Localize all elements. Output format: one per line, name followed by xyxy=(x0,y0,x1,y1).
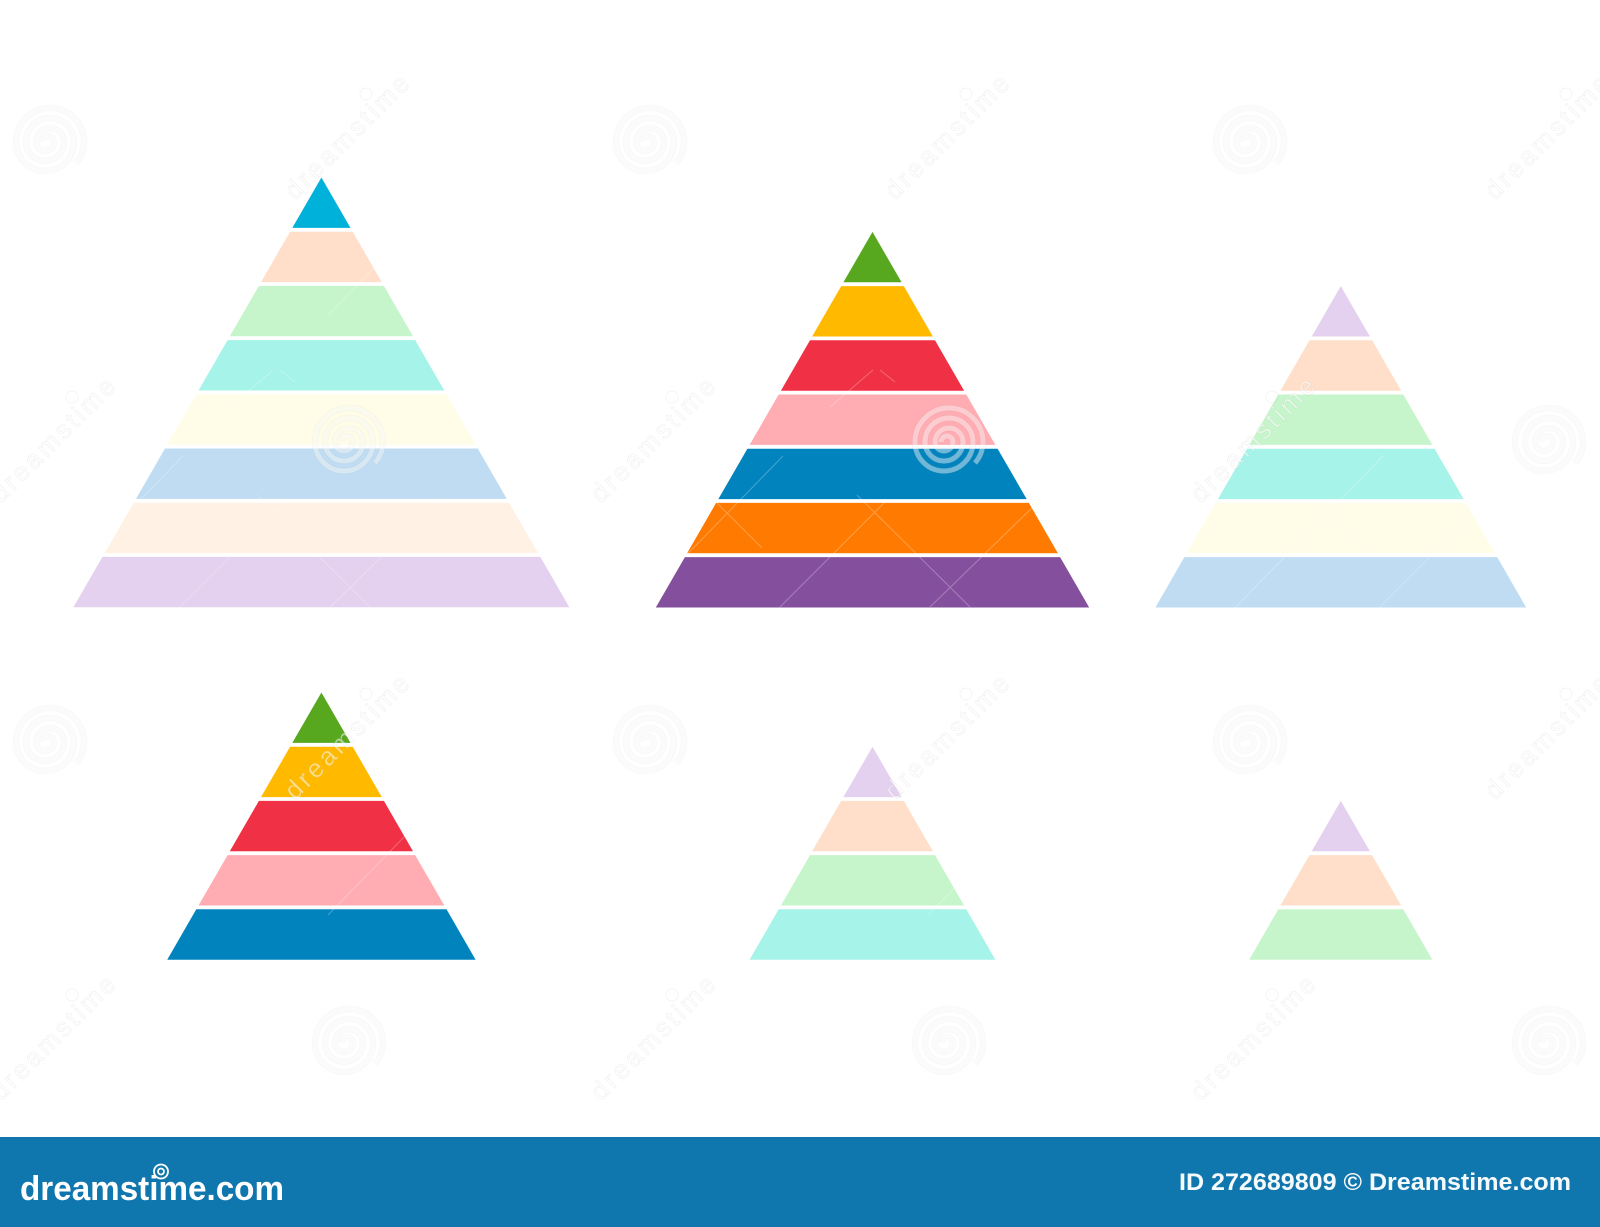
band 6 light blue xyxy=(1155,557,1526,608)
band 3 red xyxy=(230,801,413,851)
band 4 pink xyxy=(198,855,444,906)
band 3 mint green xyxy=(230,286,413,336)
band 6 orange xyxy=(687,503,1058,553)
band 3 mint green xyxy=(1249,909,1432,960)
band 1 lilac xyxy=(843,747,902,797)
footer bar xyxy=(0,1137,1600,1227)
band 4 aqua xyxy=(198,340,444,390)
band 2 amber xyxy=(812,286,933,336)
watermark: spirals xyxy=(16,108,1583,1072)
band 3 mint green xyxy=(1249,394,1432,445)
pyramid: three pastel bands xyxy=(1249,801,1432,960)
band 2 peach xyxy=(1280,855,1401,906)
pyramid: five saturated bands xyxy=(167,692,476,960)
band 3 red xyxy=(781,340,964,391)
band 1 lilac xyxy=(1312,801,1370,851)
band 7 cream xyxy=(105,503,538,553)
band 8 lilac xyxy=(73,557,569,607)
band 3 mint green xyxy=(781,855,964,906)
band 4 aqua xyxy=(750,909,995,960)
band 6 light blue xyxy=(136,448,507,499)
footer image id and credit: ID 272689809 © Dreamstime.com xyxy=(1179,1169,1571,1196)
band 2 peach xyxy=(812,801,933,851)
pyramid: four pastel bands xyxy=(750,747,995,960)
band 2 peach xyxy=(1280,340,1401,391)
footer logo wordmark: dreamstime.com xyxy=(20,1170,284,1208)
band 5 blue xyxy=(167,909,476,960)
band 1 green xyxy=(292,692,350,743)
band 5 pale yellow xyxy=(167,394,476,445)
watermark: diagonal lines xyxy=(28,70,1600,915)
band 2 peach xyxy=(261,232,382,282)
band 4 aqua xyxy=(1218,449,1464,499)
pyramid: seven saturated bands xyxy=(656,232,1089,608)
band 4 pink xyxy=(750,394,995,445)
band 5 blue xyxy=(718,449,1027,499)
pyramid: eight pastel bands xyxy=(73,178,569,607)
footer logo spiral icon xyxy=(154,1164,168,1178)
band 5 pale yellow xyxy=(1187,503,1495,553)
band 2 amber xyxy=(261,747,382,797)
band 7 purple xyxy=(656,557,1089,608)
band 1 green xyxy=(843,232,902,282)
band 1 lilac xyxy=(1312,286,1370,336)
pyramid: six pastel bands xyxy=(1155,286,1526,608)
band 1 cyan xyxy=(292,178,350,228)
